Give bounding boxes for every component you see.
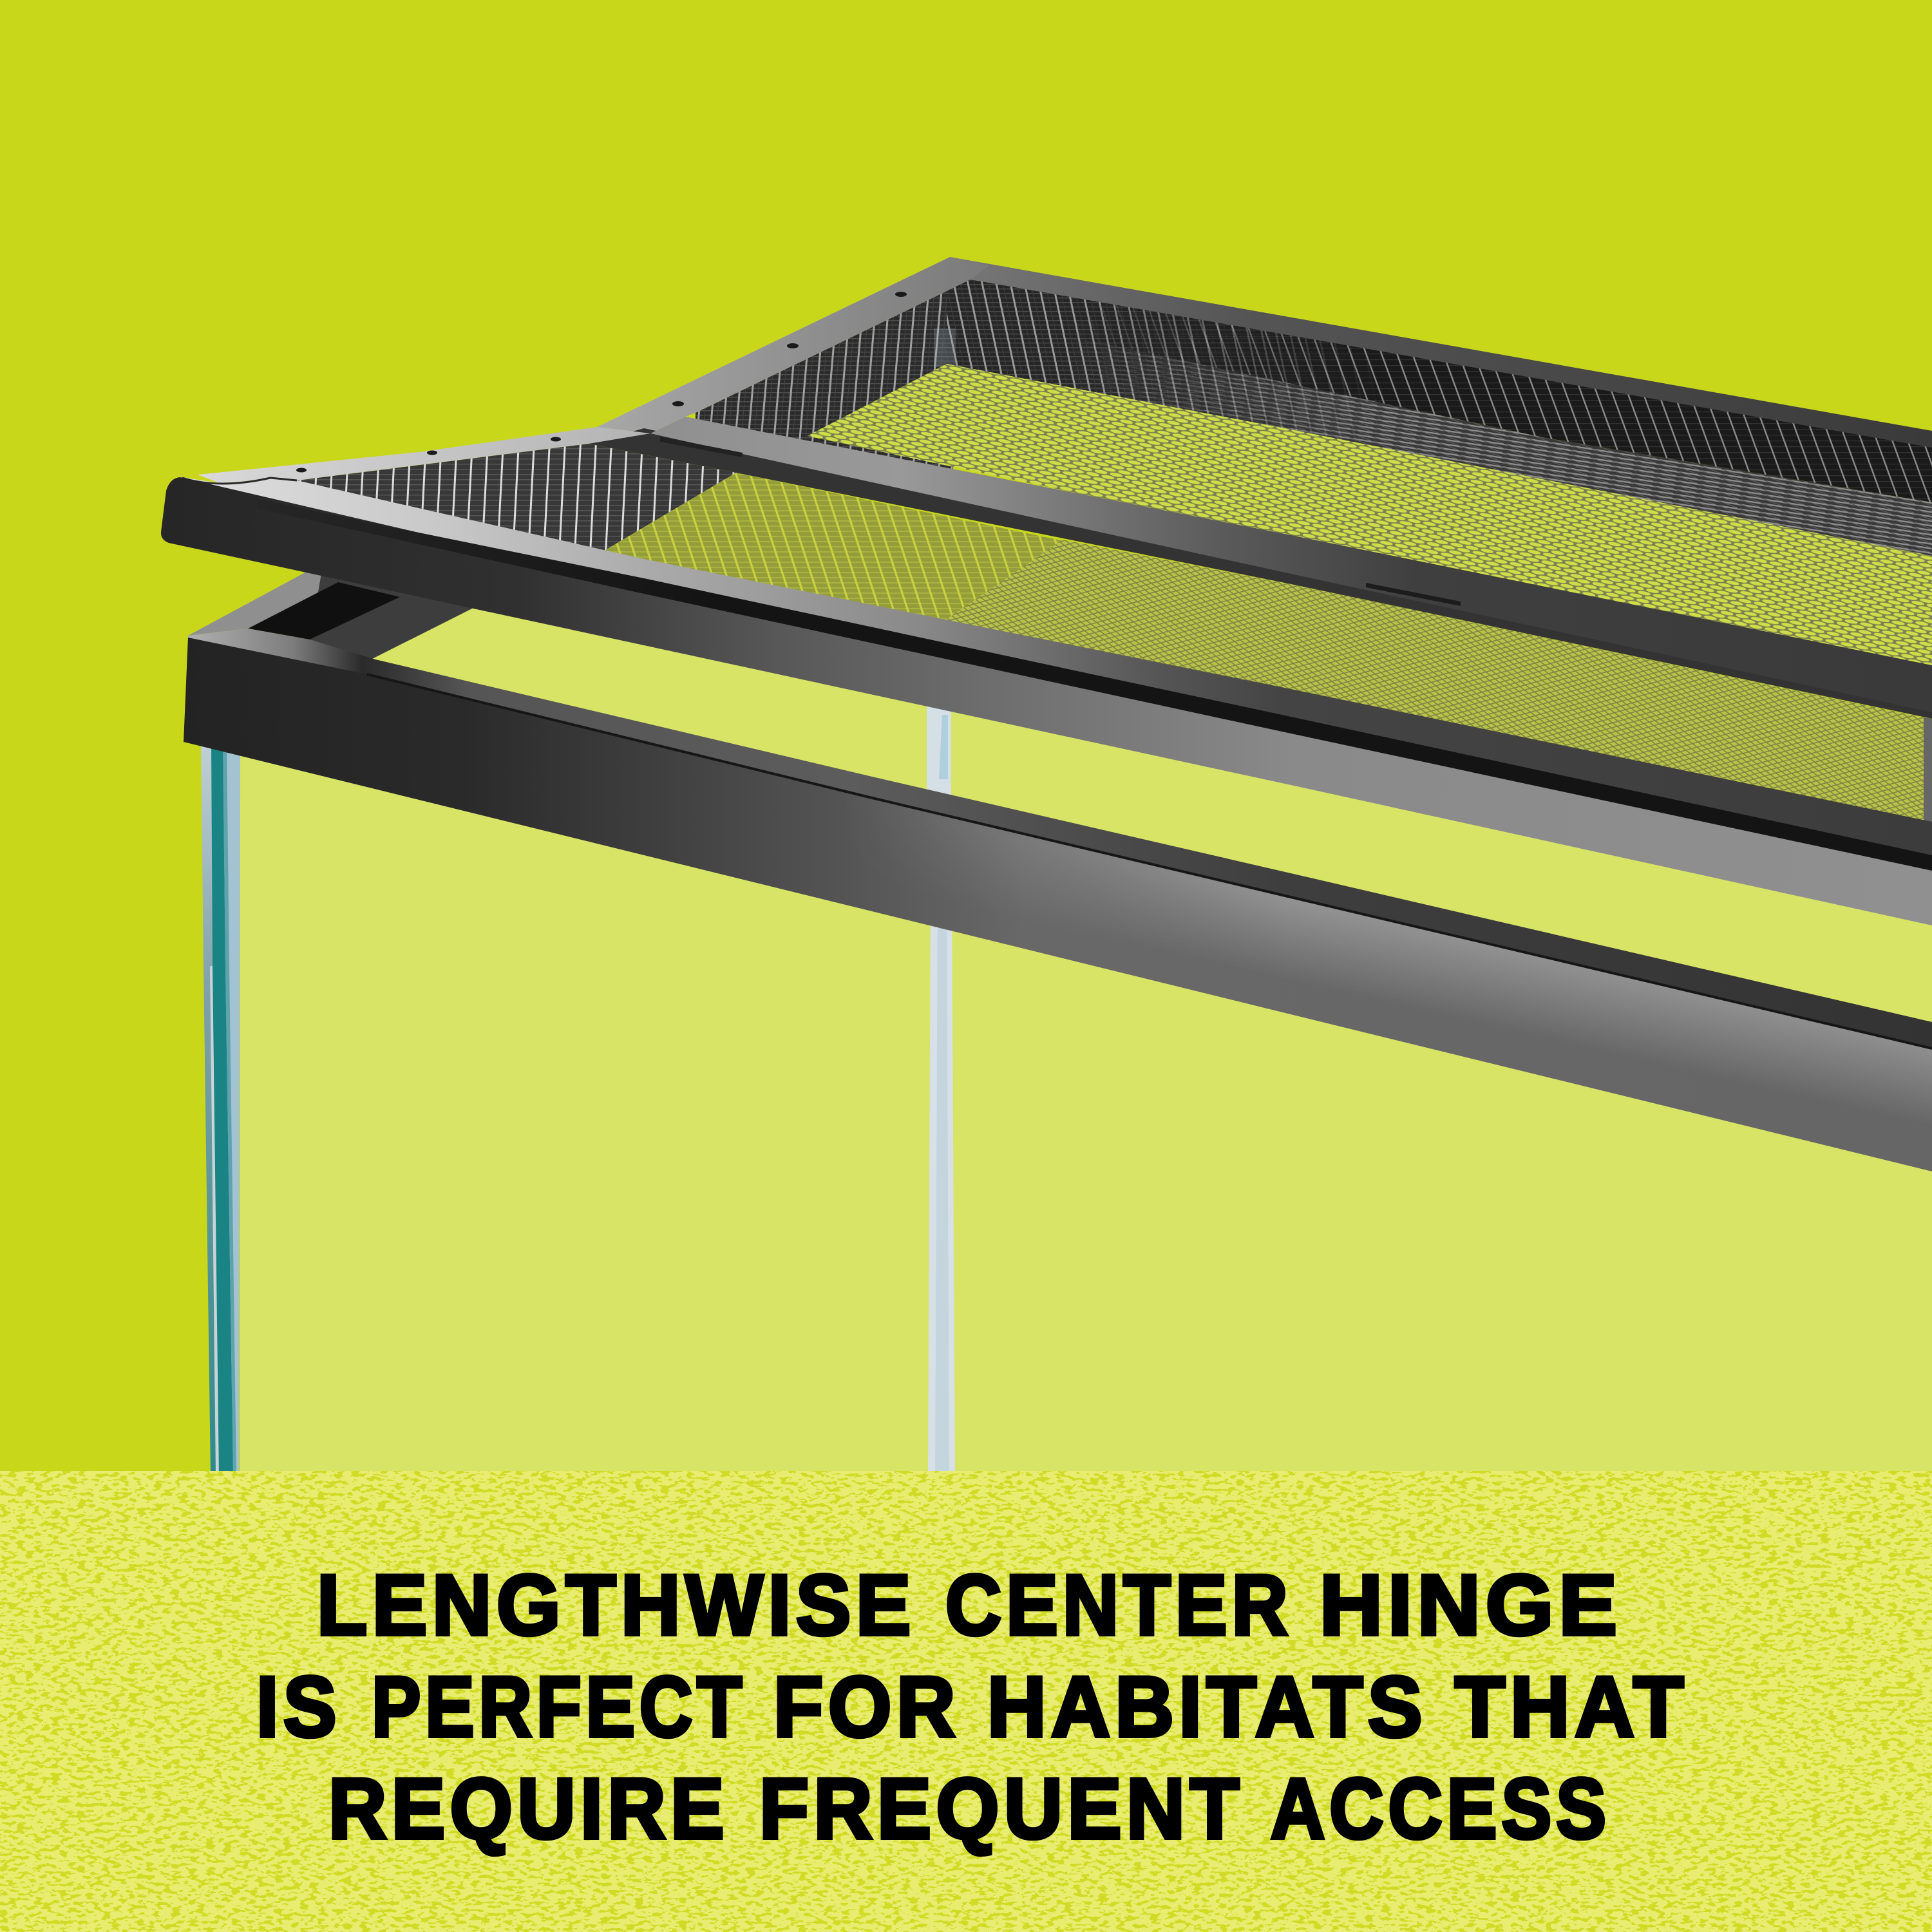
hinge clip right (1366, 583, 1461, 606)
caption text: CENTER (945, 1558, 1293, 1653)
front panel mesh over tank (599, 473, 1932, 831)
lid front face shadow (258, 499, 1932, 871)
caption text: REQUIRE (328, 1761, 729, 1857)
left glass edge (201, 741, 240, 1475)
caption text: HABITATS (987, 1660, 1427, 1755)
mesh lid (161, 257, 1932, 925)
center hinge upper strip (650, 417, 1932, 712)
back panel side frame (597, 257, 989, 433)
caption text: IS (256, 1660, 341, 1755)
front panel side frame (198, 427, 650, 483)
front rail highlight (930, 813, 1932, 1110)
caption text: LENGTHWISE (317, 1558, 916, 1653)
left top ledge (188, 570, 361, 636)
back glass edge (927, 702, 955, 1475)
screws (296, 292, 907, 473)
back panel top rail (950, 257, 1932, 448)
caption text: THAT (1455, 1660, 1689, 1755)
hinge clip left (660, 437, 743, 457)
caption text: PERFECT (372, 1660, 746, 1755)
rear side wall (310, 570, 473, 659)
caption text: FREQUENT (759, 1761, 1244, 1857)
front rail shadow line (367, 674, 1932, 1048)
back panel mesh over tank (807, 364, 1932, 670)
front panel dark mesh (297, 444, 736, 554)
tank interior glass tint (240, 605, 1932, 1475)
caption text: ACCESS (1271, 1761, 1611, 1857)
caption text (256, 1558, 1689, 1857)
textured caption band (0, 1471, 1932, 1932)
front rail face (184, 638, 1932, 1171)
front panel front frame top (178, 477, 1932, 863)
rear channel opening (248, 582, 400, 639)
front rail top ledge (188, 629, 1932, 1050)
caption text: HINGE (1320, 1558, 1622, 1653)
center hinge lower strip (589, 428, 1932, 719)
lid front face (161, 477, 1932, 925)
tank frame (184, 570, 1932, 1171)
lid corner seam (182, 478, 297, 484)
back panel dark mesh (696, 279, 1932, 556)
caption text: FOR (773, 1660, 960, 1755)
